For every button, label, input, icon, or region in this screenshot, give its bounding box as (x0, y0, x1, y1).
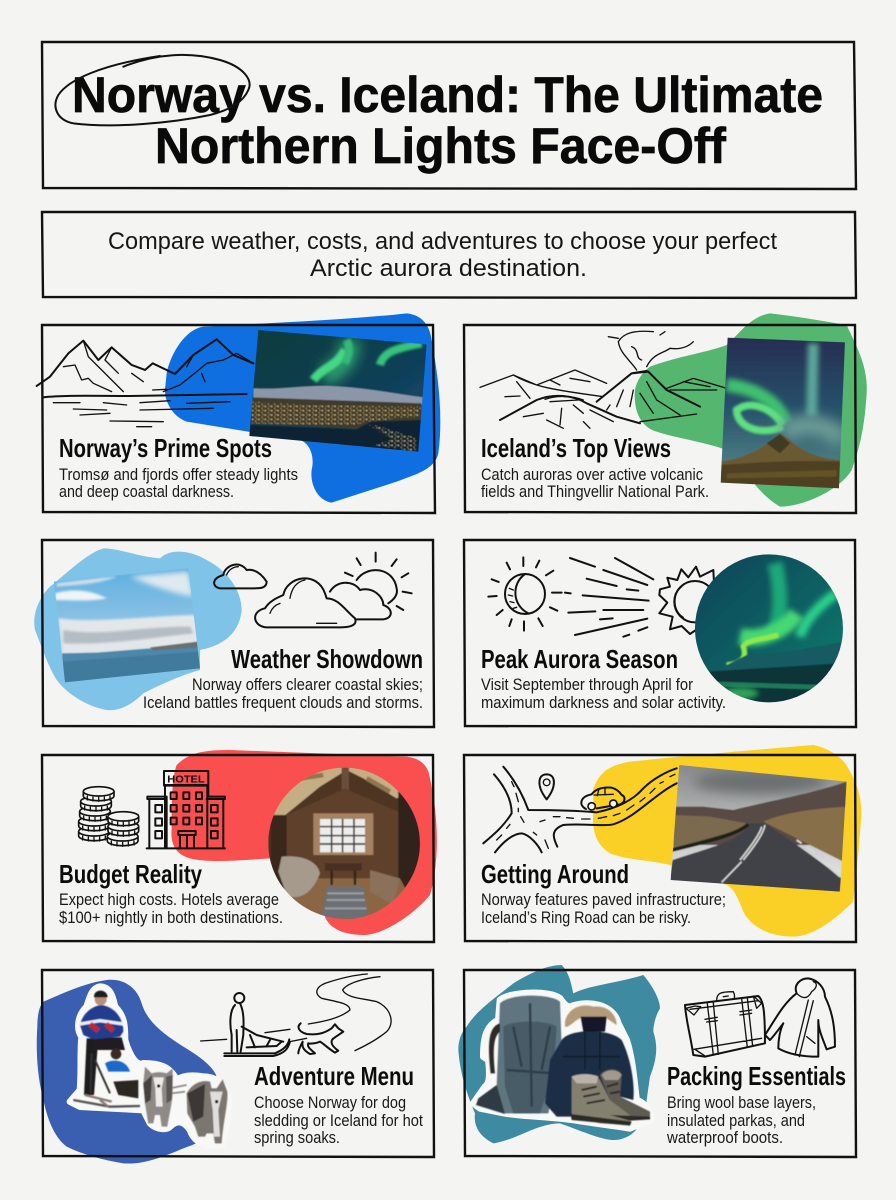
sketch: moon, sun and solar wind (488, 557, 717, 637)
green paint blob (635, 313, 867, 507)
blue paint blob (165, 313, 440, 503)
description: Catch auroras over active volcanic (481, 465, 703, 484)
description (481, 890, 726, 927)
sketch: coin stacks (79, 787, 139, 846)
card border (464, 970, 856, 1157)
description: Iceland battles frequent clouds and storms. (143, 693, 423, 712)
description: and deep coastal darkness. (59, 482, 234, 501)
panel: Norway's Prime Spots (37, 313, 440, 513)
cutout photo: musher and sled dogs (70, 987, 228, 1145)
photo: aurora over Tromsø (249, 330, 426, 452)
description: Choose Norway for dog (254, 1093, 406, 1112)
white sticker outline (70, 987, 228, 1145)
description: Bring wool base layers, (667, 1093, 816, 1112)
description: sledding or Iceland for hot (254, 1111, 423, 1130)
panel: Peak Aurora Season (464, 540, 856, 727)
sketch: suitcase and jacket (685, 978, 835, 1057)
panel: Budget Reality (42, 750, 437, 942)
description: waterproof boots. (666, 1128, 783, 1147)
sketch: winding road with car and pin (483, 767, 677, 852)
description: Norway features paved infrastructure; (481, 890, 726, 909)
light blue paint blob (34, 548, 242, 710)
sketch: mountains and fjord (37, 339, 253, 427)
panel: Adventure Menu (37, 970, 434, 1164)
description: maximum darkness and solar activity. (481, 693, 726, 712)
sketch: volcano and hills (480, 331, 727, 428)
title panel (42, 42, 856, 189)
photo: road through Icelandic landscape (667, 762, 850, 895)
description: Iceland’s Ring Road can be risky. (481, 908, 691, 927)
description (481, 465, 709, 501)
heading: Budget Reality (59, 859, 202, 889)
heading: Adventure Menu (254, 1061, 414, 1091)
card border (464, 755, 856, 942)
heading: Weather Showdown (231, 644, 423, 674)
description (666, 1093, 816, 1147)
description: Tromsø and fjords offer steady lights (59, 465, 298, 484)
navy paint blob (37, 980, 228, 1164)
red paint blob (171, 750, 437, 935)
panel: Packing Essentials (458, 965, 856, 1157)
heading: Packing Essentials (667, 1061, 846, 1091)
description: spring soaks. (254, 1128, 340, 1147)
hand-drawn circle around Norway (55, 55, 250, 125)
white sticker outline (473, 993, 651, 1128)
card border (464, 325, 856, 513)
panel: Iceland's Top Views (464, 313, 867, 513)
heading: Peak Aurora Season (481, 644, 678, 674)
description: Expect high costs. Hotels average (59, 890, 279, 909)
panel: Weather Showdown (34, 540, 434, 727)
cutout photo: backpack, parka and boots (473, 993, 651, 1128)
subtitle text (108, 228, 777, 282)
description: $100+ nightly in both destinations. (59, 908, 283, 927)
description: insulated parkas, and (667, 1111, 805, 1130)
yellow paint blob (593, 745, 861, 937)
sketch: hotel building: HOTEL (167, 774, 205, 785)
heading: Getting Around (481, 859, 629, 889)
heading: Norway’s Prime Spots (59, 433, 272, 463)
sketch: hotel building (147, 771, 225, 848)
photo: aurora circle (693, 553, 847, 703)
description (143, 675, 423, 712)
description: Visit September through April for (481, 675, 693, 694)
sketch: clouds and sun (214, 553, 412, 627)
subtitle text: Compare weather, costs, and adventures to choose your perfect (108, 228, 777, 255)
card border (42, 540, 434, 727)
card border (464, 540, 856, 727)
title text (72, 67, 823, 174)
description: fields and Thingvellir National Park. (481, 482, 709, 501)
card border (42, 970, 434, 1157)
description (254, 1093, 423, 1147)
photo: cozy cabin interior (263, 765, 423, 922)
description: Norway offers clearer coastal skies; (192, 675, 423, 694)
title text: Northern Lights Face-Off (155, 118, 726, 174)
title text: Norway vs. Iceland: The Ultimate (72, 67, 823, 123)
card border (42, 755, 434, 942)
description (59, 890, 283, 927)
subtitle text: Arctic aurora destination. (310, 255, 587, 282)
description (481, 675, 726, 712)
subtitle panel (42, 212, 856, 298)
panel: Getting Around (464, 745, 861, 942)
description (59, 465, 298, 501)
teal paint blob (458, 965, 660, 1143)
photo: coastal sky (50, 565, 203, 685)
heading: Iceland’s Top Views (481, 433, 671, 463)
photo: aurora over Kirkjufell (717, 335, 850, 492)
card border (42, 325, 435, 513)
sketch: dog sled and trail (201, 974, 391, 1056)
